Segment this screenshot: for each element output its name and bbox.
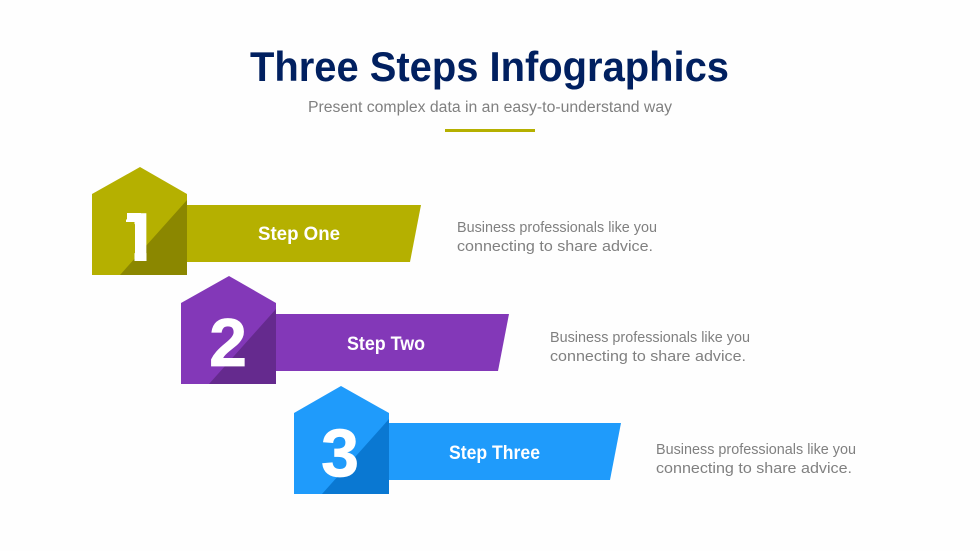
step 1 banner: Step One <box>258 224 340 245</box>
step 1 house badge <box>92 167 187 276</box>
title: Three Steps Infographics <box>250 43 729 90</box>
step 2 banner <box>276 314 509 371</box>
step 3 banner <box>389 423 621 480</box>
step 2 house badge <box>181 276 276 384</box>
step 3 description: connecting to share advice. <box>656 461 852 477</box>
step 2 <box>181 276 509 384</box>
step 1 description: connecting to share advice. <box>457 239 653 255</box>
step 3 house badge <box>294 386 389 494</box>
step 3 banner: Step Three <box>449 443 540 464</box>
step 1 <box>92 167 421 276</box>
subtitle: Present complex data in an easy-to-understand way <box>308 99 672 116</box>
step 3 house badge: 3 <box>321 415 359 491</box>
title underline <box>445 129 535 132</box>
step 3 <box>294 386 621 494</box>
step 2 description: connecting to share advice. <box>550 349 746 365</box>
step 1 description: Business professionals like you <box>457 220 657 236</box>
step 1 house badge: 1 <box>120 200 158 276</box>
step 1 banner <box>187 205 421 262</box>
step 3 description: Business professionals like you <box>656 442 856 458</box>
step 2 banner: Step Two <box>347 334 425 355</box>
step 2 description: Business professionals like you <box>550 330 750 346</box>
step 2 house badge: 2 <box>209 305 247 381</box>
